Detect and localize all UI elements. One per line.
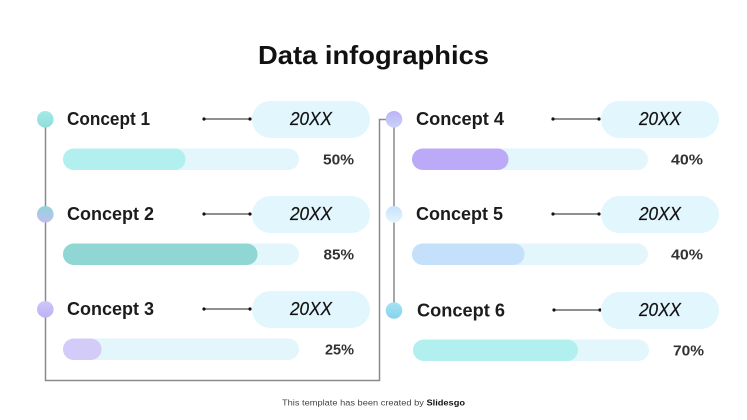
marker: concept 3 [37,301,54,318]
label: concept 6: Concept 6 [417,300,505,320]
panel: concept 1 [37,101,370,170]
connector: timeline frame linking the two columns [46,120,394,380]
value: concept 6: 70% [673,344,704,360]
footer credit: This template has been created by Slidesgo [282,398,465,408]
marker: concept 4 [386,111,402,128]
marker: concept 6 [386,302,402,319]
panel: concept 3 [37,291,370,360]
arrow: concept 1 connector [202,117,252,121]
value: concept 5: 40% [671,248,703,264]
year: concept 6: 20XX [638,300,682,320]
label: concept 5: Concept 5 [416,203,503,224]
panel: concept 6 [386,292,719,361]
arrow: concept 2 connector [202,212,252,216]
label: concept 2: Concept 2 [67,203,154,224]
label: concept 3: Concept 3 [67,298,154,319]
panel: concept 2 [37,196,370,265]
arrow: concept 6 connector [552,308,602,312]
panel: concept 4 [386,101,719,170]
year: concept 5: 20XX [638,204,682,224]
arrow: concept 4 connector [551,117,601,121]
panel: concept 5 [386,196,719,265]
progress bar: concept 1 [63,148,299,170]
pill: concept 3 year [252,291,370,328]
marker: concept 5 [386,206,402,223]
progress bar: concept 6 [413,340,649,361]
pill: concept 4 year [601,101,719,138]
year: concept 3: 20XX [289,299,333,319]
progress bar: concept 5 [412,244,648,265]
marker: concept 1 [37,111,54,128]
title: Data infographics [258,40,489,70]
value: concept 3: 25% [325,342,354,358]
pill: concept 5 year [601,196,719,233]
pill: concept 1 year [252,101,370,138]
arrow: concept 3 connector [202,307,252,311]
marker: concept 2 [37,206,54,223]
label: concept 1: Concept 1 [67,108,150,129]
connector: right column timeline [393,120,395,310]
year: concept 4: 20XX [638,109,682,129]
year: concept 2: 20XX [289,204,333,224]
progress bar: concept 4 [412,148,648,170]
year: concept 1: 20XX [289,109,333,129]
pill: concept 2 year [252,196,370,233]
value: concept 2: 85% [324,248,354,264]
label: concept 4: Concept 4 [416,108,505,129]
value: concept 4: 40% [671,152,703,168]
progress bar: concept 2 [63,244,299,265]
value: concept 1: 50% [323,152,354,168]
progress bar: concept 3 [63,338,299,360]
pill: concept 6 year [601,292,719,329]
arrow: concept 5 connector [551,212,601,216]
